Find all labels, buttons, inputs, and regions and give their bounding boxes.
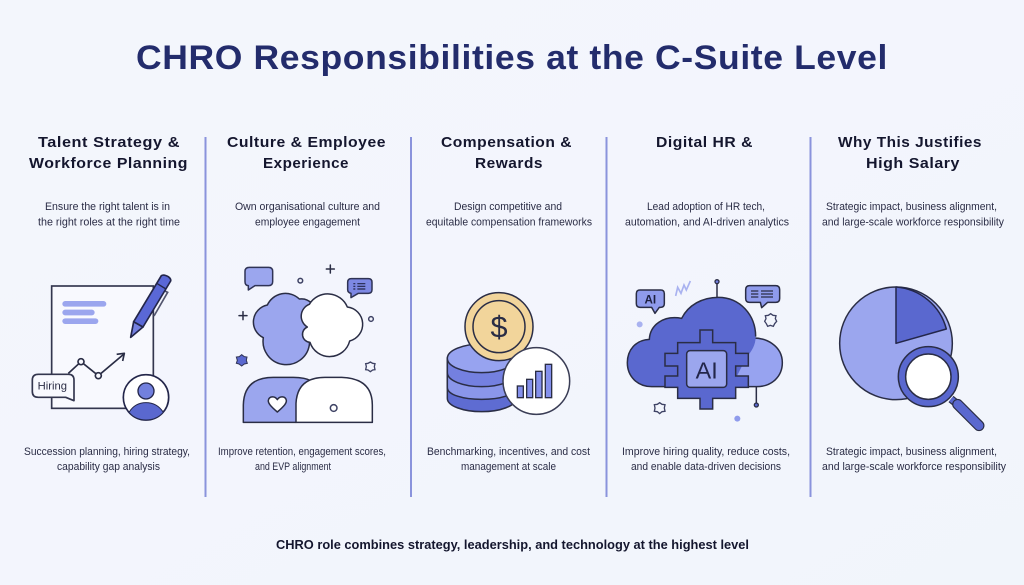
heading: compensation — [441, 134, 572, 172]
text: digital description: automation, and AI-driven analytics — [625, 216, 789, 228]
heading: compensation: Compensation & — [441, 134, 572, 151]
text: digital outcomes: and enable data-driven decisions — [631, 461, 781, 473]
icon: ai chip: AI — [696, 357, 718, 383]
text: digital description: Lead adoption of HR tech, — [647, 201, 765, 213]
text: digital outcomes: Improve hiring quality, reduce costs, — [622, 446, 790, 458]
text: compensation description: equitable compensation frameworks — [426, 216, 592, 228]
heading: digital hr: Digital HR & — [656, 134, 753, 151]
text: compensation outcomes: management at scale — [461, 461, 556, 473]
heading: talent strategy: Talent Strategy & — [38, 134, 180, 151]
panel: digital hr — [622, 134, 790, 473]
icon: magnifying glass — [898, 347, 979, 426]
title: CHRO Responsibilities at the C-Suite Level — [136, 39, 888, 77]
icon: document with pen, chart and avatar — [32, 275, 171, 420]
text: digital outcomes — [622, 446, 790, 473]
text: culture outcomes — [218, 446, 386, 473]
text: culture description: Own organisational culture and — [235, 201, 380, 213]
text: talent outcomes — [24, 446, 190, 473]
text: culture outcomes: Improve retention, engagement scores, — [218, 446, 386, 458]
heading: talent strategy — [29, 134, 188, 172]
text: talent description: the right roles at the right time — [38, 216, 180, 228]
panel: compensation and rewards — [426, 134, 592, 473]
text: digital description — [625, 201, 789, 228]
panel: why this justifies high salary — [822, 134, 1006, 473]
icon: avatar — [123, 375, 169, 420]
text: salary description: and large-scale workforce responsibility — [822, 216, 1004, 228]
callout: ai bubble — [636, 290, 664, 313]
footer: takeaway: CHRO role combines strategy, leadership, and technology at the highest level — [276, 538, 749, 552]
chart: growth bars — [503, 348, 570, 414]
heading: high salary — [838, 134, 982, 172]
heading: high salary: High Salary — [866, 155, 960, 172]
heading: culture — [227, 134, 386, 172]
text: talent description — [38, 201, 180, 228]
panel: talent strategy and workforce planning — [24, 134, 190, 473]
heading: compensation: Rewards — [475, 155, 543, 172]
text: salary description — [822, 201, 1004, 228]
icon: gold coin: $ — [490, 310, 508, 344]
text: compensation outcomes: Benchmarking, incentives, and cost — [427, 446, 590, 458]
text: salary outcomes: Strategic impact, business alignment, — [826, 446, 997, 458]
icon: two people with chat bubbles — [236, 265, 375, 422]
text: salary description: Strategic impact, business alignment, — [826, 201, 997, 213]
callout: ai bubble: AI — [645, 294, 656, 307]
text: salary outcomes — [822, 446, 1006, 473]
text: talent description: Ensure the right talent is in — [45, 201, 170, 213]
text: compensation description — [426, 201, 592, 228]
heading: talent strategy: Workforce Planning — [29, 155, 188, 172]
panel: culture and employee experience — [218, 134, 386, 473]
callout: text bubble — [746, 286, 780, 308]
heading: culture: Culture & Employee — [227, 134, 386, 151]
icon: pie chart with magnifier — [840, 287, 979, 426]
text: compensation outcomes — [427, 446, 590, 473]
text: culture description — [235, 201, 380, 228]
icon: coins and bar chart — [447, 293, 570, 414]
callout: hiring bubble — [32, 374, 74, 401]
icon: ai chip — [665, 330, 748, 409]
icon: ai cloud with chip — [627, 280, 782, 422]
text: salary outcomes: and large-scale workforce responsibility — [822, 461, 1006, 473]
text: compensation description: Design competitive and — [454, 201, 562, 213]
text: culture description: employee engagement — [255, 216, 360, 228]
text: talent outcomes: Succession planning, hiring strategy, — [24, 446, 190, 458]
text: culture outcomes: and EVP alignment — [255, 461, 331, 473]
heading: culture: Experience — [263, 155, 349, 172]
heading: high salary: Why This Justifies — [838, 134, 982, 151]
text: talent outcomes: capability gap analysis — [57, 461, 160, 473]
callout: hiring bubble: Hiring — [38, 381, 67, 393]
